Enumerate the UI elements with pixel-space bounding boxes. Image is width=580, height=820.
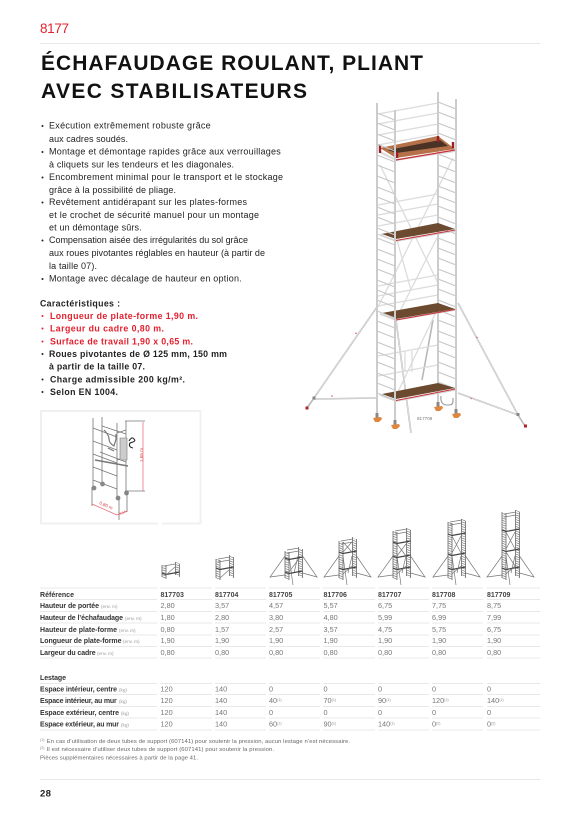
row: espace extérieur, centre: (kg) (121, 711, 129, 716)
diagram: platform dimensions: 1,65 m (139, 448, 144, 462)
feature list: Montage et démontage rapides grâce aux verrouillages (49, 147, 281, 157)
row: espace extérieur, centre: 140 (215, 708, 227, 717)
rear end frame (438, 92, 456, 409)
row: hauteur de l'échafaudage: 6,99 (432, 613, 446, 622)
row: largeur du cadre: 0,80 (160, 648, 175, 657)
row: espace intérieur, au mur: Espace intérieur, au mur (40, 698, 117, 705)
row: espace intérieur, centre: Espace intérieur, centre (40, 686, 117, 694)
row: hauteur de l'échafaudage: Hauteur de l’échafaudage (40, 615, 123, 622)
row: référence: 817709 (487, 592, 510, 599)
row: hauteur de plate-forme: 2,57 (269, 625, 283, 634)
row: espace extérieur, au mur: 60 (269, 720, 277, 728)
row: référence: 817705 (269, 592, 292, 599)
row: hauteur de portée: 8,75 (487, 601, 501, 610)
row: espace extérieur, centre: 0 (269, 708, 273, 717)
feature list: Revêtement antidérapant sur les plates-formes (49, 197, 248, 207)
feature list: la taille 07). (49, 261, 97, 271)
row: hauteur de portée: Hauteur de portée (40, 603, 99, 610)
row: longueur de plate-forme: 1,90 (215, 636, 229, 645)
wheels (373, 396, 461, 429)
small scaffold 817706 (324, 537, 371, 585)
row: référence: 817706 (324, 592, 347, 599)
feature list: Exécution extrêmement robuste grâce (49, 121, 211, 131)
row: hauteur de l'échafaudage: 5,99 (378, 613, 392, 622)
row: référence: 817708 (432, 592, 455, 599)
small scaffold 817707 (378, 528, 425, 585)
footnotes (40, 738, 350, 761)
row: espace intérieur, centre: 0 (378, 684, 382, 694)
row: espace extérieur, au mur: 140 (378, 720, 390, 728)
row: espace extérieur, au mur: Espace extérieur, au mur (40, 722, 119, 728)
characteristics (40, 298, 227, 397)
row: hauteur de l'échafaudage: 2,80 (215, 613, 229, 622)
row: espace intérieur, au mur: (1) (332, 698, 336, 702)
row: espace intérieur, centre: (kg) (119, 688, 127, 692)
row: espace extérieur, au mur: 120 (160, 720, 173, 728)
small scaffold 817708 (433, 519, 480, 585)
row: hauteur de plate-forme: (env. m) (119, 628, 136, 633)
row: espace extérieur, au mur: (1) (390, 722, 395, 726)
row: largeur du cadre (40, 648, 501, 657)
diagram: platform dimensions: 0,80 m (99, 500, 114, 511)
row: espace intérieur, centre: 0 (487, 684, 491, 694)
row: largeur du cadre: 0,80 (269, 648, 283, 657)
row: espace intérieur, au mur: 140 (215, 696, 227, 705)
footnotes: (2) (40, 746, 44, 750)
row: espace intérieur, centre: 120 (160, 684, 173, 694)
platform 3 (380, 303, 455, 320)
row: espace intérieur, au mur: (1) (499, 698, 504, 702)
characteristics: Selon EN 1004. (50, 387, 118, 397)
row: espace extérieur, au mur: 90 (324, 720, 332, 728)
row: hauteur de portée: 2,80 (160, 601, 175, 610)
title: AVEC STABILISATEURS (41, 80, 307, 103)
product code: 8177 (40, 21, 69, 36)
row: espace intérieur, au mur: (1) (386, 698, 391, 702)
row: largeur du cadre: Largeur du cadre (40, 650, 96, 657)
row: largeur du cadre: 0,80 (324, 648, 338, 657)
row: espace intérieur, centre: 140 (215, 684, 227, 694)
platform 2 (380, 223, 455, 241)
row: espace extérieur, au mur: (2) (491, 722, 495, 726)
row: espace intérieur, centre: 0 (269, 684, 273, 694)
model label: 817709 (417, 416, 433, 421)
row: longueur de plate-forme: 1,90 (269, 636, 283, 645)
feature list: Montage avec décalage de hauteur en option. (49, 274, 242, 284)
row: référence: 817707 (378, 592, 401, 599)
row: longueur de plate-forme: 1,90 (432, 636, 446, 645)
row: espace intérieur, centre: 0 (432, 684, 436, 694)
row: hauteur de portée: 7,75 (432, 601, 446, 610)
characteristics: Caractéristiques : (40, 298, 120, 308)
row: longueur de plate-forme: 1,90 (487, 636, 501, 645)
row: espace intérieur, au mur: 90 (378, 696, 386, 705)
row: hauteur de portée: 6,75 (378, 601, 392, 610)
feature list: aux roues pivotantes réglables en hauteur (à partir de (49, 248, 265, 258)
row: hauteur de portée: 4,57 (269, 601, 283, 610)
small scaffold 817709 (487, 510, 534, 585)
title: ÉCHAFAUDAGE ROULANT, PLIANT (41, 52, 423, 75)
row: largeur du cadre: 0,80 (432, 648, 446, 657)
main scaffold illustration (306, 92, 527, 433)
row: hauteur de plate-forme: 1,57 (215, 625, 229, 634)
row: espace intérieur, centre (40, 684, 491, 694)
row: espace extérieur, au mur: (1) (277, 722, 282, 726)
row: espace intérieur, au mur: 70 (324, 696, 332, 705)
row: espace intérieur, au mur: 40 (269, 696, 277, 705)
row: espace extérieur, centre: 0 (487, 708, 491, 717)
row: espace intérieur, centre: 0 (324, 684, 328, 694)
characteristics: Surface de travail 1,90 x 0,65 m. (50, 336, 193, 346)
rear rails and diagonals (378, 103, 438, 145)
row: hauteur de plate-forme: 3,57 (324, 625, 338, 634)
row: espace intérieur, au mur: (kg) (119, 699, 127, 704)
characteristics: Longueur de plate-forme 1,90 m. (50, 311, 198, 321)
row: hauteur de l'échafaudage: (env. m) (125, 616, 142, 621)
row: hauteur de portée: (env. m) (101, 604, 118, 609)
row: hauteur de portée: 3,57 (215, 601, 229, 610)
front end frame (377, 103, 395, 420)
small scaffold 817703 (162, 562, 180, 579)
row: espace extérieur, au mur: (2) (436, 722, 440, 726)
row: espace extérieur, au mur: 140 (215, 720, 227, 728)
diagram: platform dimensions (41, 411, 200, 524)
feature list (42, 121, 283, 284)
row: espace extérieur, centre (40, 708, 491, 717)
feature list: aux cadres soudés. (49, 134, 128, 144)
small scaffold 817704 (216, 555, 234, 580)
row: longueur de plate-forme: 1,90 (160, 636, 175, 645)
feature list: Encombrement minimal pour le transport et le stockage (49, 172, 283, 182)
row: hauteur de l'échafaudage: 7,99 (487, 613, 501, 622)
feature list: Compensation aisée des irrégularités du sol grâce (49, 235, 248, 245)
footnotes: (1) (40, 738, 44, 742)
footnotes: Il est nécessaire d’utiliser deux tubes de support (607141) pour soutenir la pression. (47, 747, 274, 753)
row: espace intérieur, au mur: 120 (432, 696, 444, 705)
characteristics: Charge admissible 200 kg/m². (50, 374, 185, 384)
stabilizers (306, 303, 527, 433)
characteristics: à partir de la taille 07. (49, 362, 145, 372)
row: espace intérieur, au mur: (1) (444, 698, 449, 702)
row: espace extérieur, au mur (40, 720, 495, 728)
footnotes: En cas d’utilisation de deux tubes de support (607141) pour soutenir la pression, aucun lestage n’est nécessaire. (47, 739, 350, 745)
row: longueur de plate-forme: (env. m) (123, 639, 140, 644)
row: longueur de plate-forme: Longueur de plate-forme (40, 638, 122, 645)
row: espace extérieur, centre: 0 (378, 708, 382, 717)
small scaffold 817705 (270, 547, 317, 585)
row: hauteur de l'échafaudage: 1,80 (160, 613, 175, 622)
row: référence: Référence (40, 592, 74, 599)
row: espace extérieur, centre: 0 (432, 708, 436, 717)
page number: 28 (40, 788, 52, 800)
row: référence (40, 592, 510, 599)
row: espace extérieur, centre: 0 (324, 708, 328, 717)
row: hauteur de plate-forme: 0,80 (160, 625, 175, 634)
characteristics: Roues pivotantes de Ø 125 mm, 150 mm (49, 349, 227, 359)
row: longueur de plate-forme (40, 636, 501, 645)
footnotes: Pièces supplémentaires nécessaires à partir de la page 41. (40, 755, 198, 761)
platform 1 (380, 136, 455, 160)
row: espace intérieur, au mur: (1) (277, 698, 282, 702)
row: largeur du cadre: 0,80 (378, 648, 392, 657)
row: hauteur de plate-forme (40, 625, 501, 634)
row: espace extérieur, au mur: 0 (487, 720, 491, 728)
feature list: et un démontage sûrs. (49, 223, 142, 233)
row: largeur du cadre: 0,80 (215, 648, 229, 657)
row: référence: 817704 (215, 592, 238, 599)
row: espace intérieur, au mur (40, 696, 504, 705)
feature list: à cliquets sur les tendeurs et les diagonales. (49, 160, 234, 170)
title (41, 52, 423, 103)
row: espace extérieur, centre: Espace extérieur, centre (40, 710, 119, 717)
feature list: grâce à la possibilité de pliage. (49, 185, 176, 195)
row: longueur de plate-forme: 1,90 (324, 636, 338, 645)
row: espace extérieur, au mur: 0 (432, 720, 436, 728)
row: hauteur de l'échafaudage: 4,80 (324, 613, 338, 622)
row: hauteur de l'échafaudage: 3,80 (269, 613, 283, 622)
row: hauteur de plate-forme: Hauteur de plate-forme (40, 627, 117, 634)
row: largeur du cadre: 0,80 (487, 648, 501, 657)
feature list: et le crochet de sécurité manuel pour un montage (49, 210, 259, 220)
row: lestage heading: Lestage (40, 675, 66, 682)
diagram: platform dimensions: 0,14 (119, 510, 127, 516)
row: espace extérieur, au mur: (1) (332, 722, 336, 726)
row: hauteur de plate-forme: 4,75 (378, 625, 392, 634)
row: référence: 817703 (160, 592, 184, 599)
row: longueur de plate-forme: 1,90 (378, 636, 392, 645)
row: hauteur de portée: 5,57 (324, 601, 338, 610)
row: espace extérieur, au mur: (kg) (121, 722, 129, 728)
row: hauteur de l'échafaudage (40, 613, 501, 622)
row: espace extérieur, centre: 120 (160, 708, 173, 717)
row: hauteur de plate-forme: 5,75 (432, 625, 446, 634)
platform 4 (380, 383, 455, 401)
row: espace intérieur, au mur: 140 (487, 696, 499, 705)
row: espace intérieur, au mur: 120 (160, 696, 173, 705)
specifications table (40, 588, 540, 730)
row: largeur du cadre: (env. m) (97, 651, 114, 656)
row: hauteur de portée (40, 601, 501, 610)
row: hauteur de plate-forme: 6,75 (487, 625, 501, 634)
characteristics: Largeur du cadre 0,80 m. (50, 324, 164, 334)
